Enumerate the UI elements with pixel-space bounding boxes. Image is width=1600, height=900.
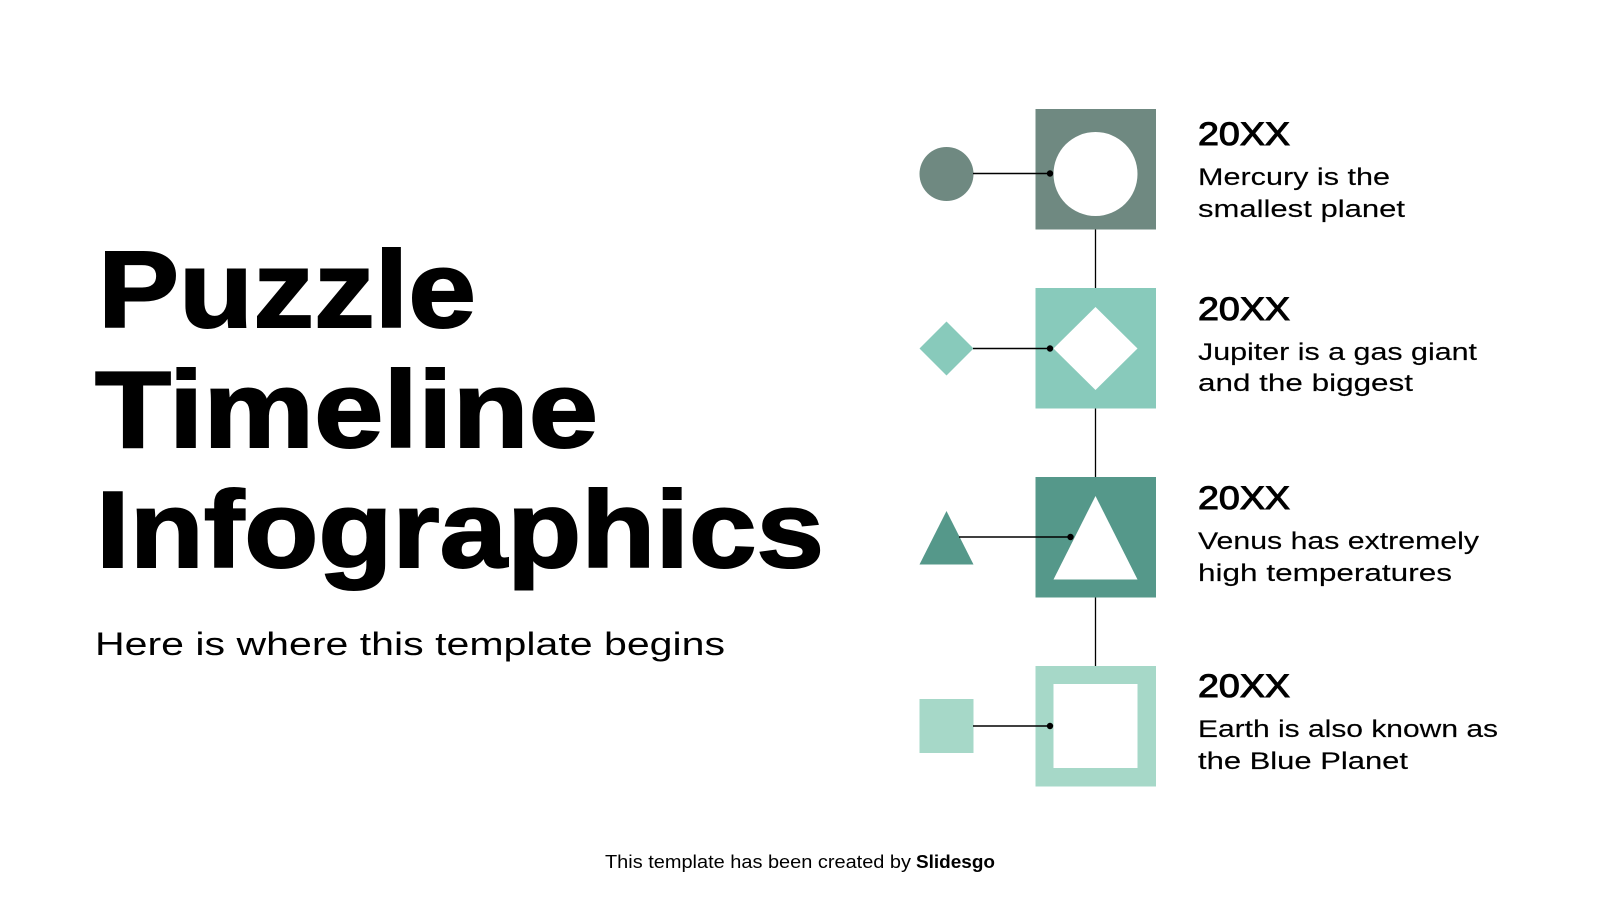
icon: square with diamond cutout — [1036, 288, 1156, 408]
timeline item: Jupiter — [920, 288, 1477, 408]
title: Timeline — [95, 349, 598, 471]
year label: 20XX — [1198, 291, 1290, 327]
connector line — [973, 723, 1053, 729]
year label: 20XX — [1198, 116, 1290, 152]
icon: square with circle cutout — [1036, 109, 1156, 230]
icon: square with square cutout — [1036, 666, 1156, 786]
description: the Blue Planet — [1198, 748, 1408, 775]
description: smallest planet — [1198, 196, 1405, 223]
description: high temperatures — [1198, 560, 1452, 587]
footer credit: Slidesgo — [916, 852, 995, 872]
year label: 20XX — [1198, 480, 1290, 516]
subtitle: Here is where this template begins — [95, 626, 725, 662]
title — [95, 229, 824, 591]
icon: small square — [920, 699, 974, 753]
description: Earth is also known as — [1198, 716, 1498, 743]
year label: 20XX — [1198, 668, 1290, 704]
timeline item: Venus — [920, 477, 1479, 598]
connector line — [973, 170, 1053, 177]
icon: small circle — [920, 147, 974, 201]
title: Puzzle — [98, 229, 476, 351]
description: and the biggest — [1198, 370, 1413, 397]
description — [1198, 528, 1479, 587]
description: Jupiter is a gas giant — [1198, 339, 1477, 366]
connector line — [959, 534, 1074, 540]
description: Mercury is the — [1198, 164, 1390, 191]
icon: square with triangle cutout — [1036, 477, 1156, 598]
timeline item: Earth — [920, 666, 1498, 786]
connector line — [973, 345, 1053, 352]
description: Venus has extremely — [1198, 528, 1479, 555]
description — [1198, 716, 1498, 775]
timeline connector — [1094, 229, 1096, 666]
description — [1198, 339, 1477, 397]
icon: small diamond — [920, 322, 974, 376]
footer credit: This template has been created by — [605, 852, 911, 872]
title: Infographics — [96, 469, 824, 591]
timeline item: Mercury — [920, 109, 1405, 230]
icon: small triangle — [920, 511, 974, 564]
description — [1198, 164, 1405, 223]
